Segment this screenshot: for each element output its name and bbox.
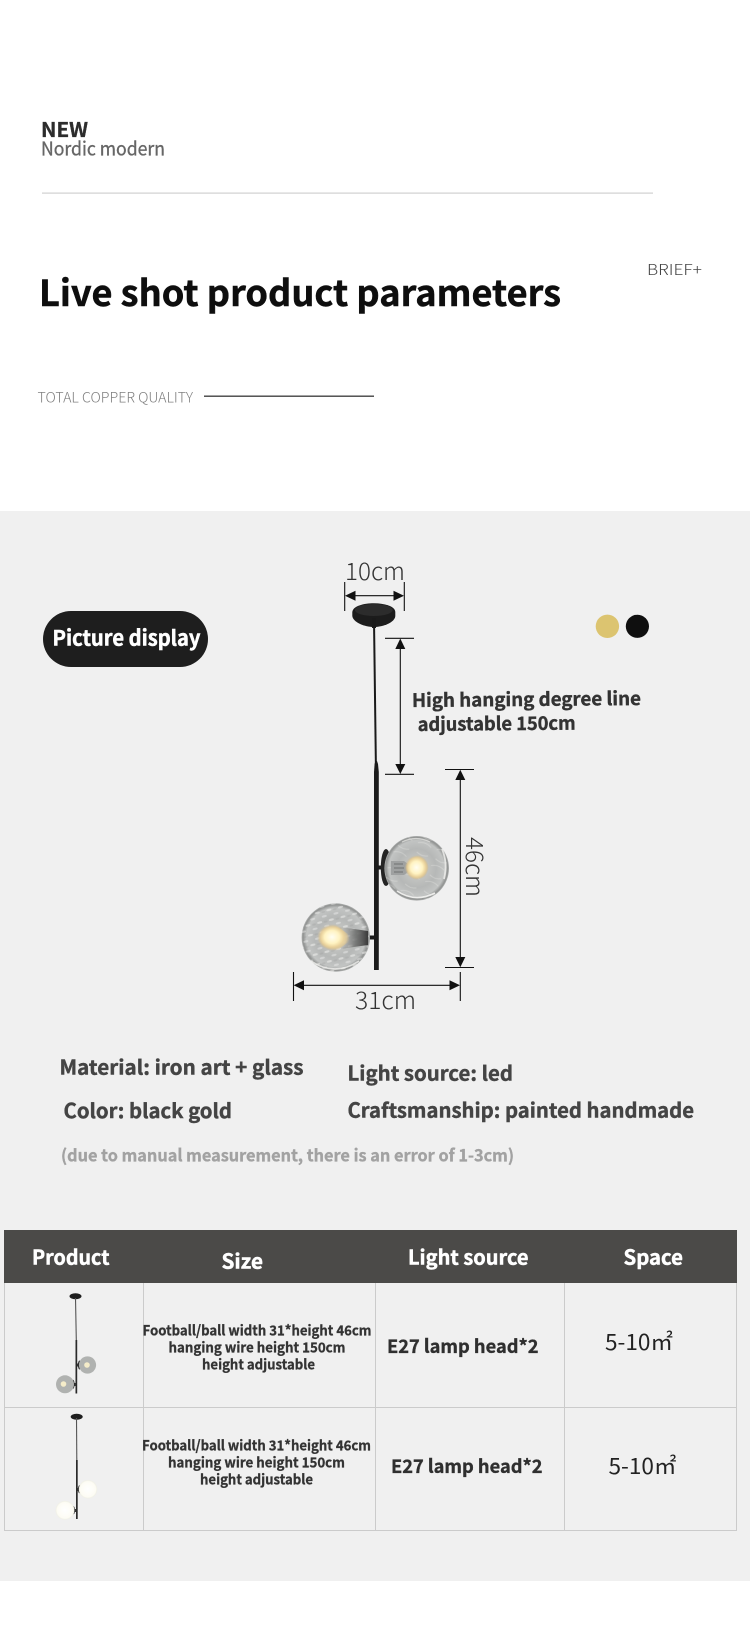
title: Live shot product parameters xyxy=(39,265,561,317)
size text: height adjustable xyxy=(202,1354,315,1374)
dimension: 10cm width xyxy=(345,552,405,611)
header: NEW / Nordic modern: Nordic modern xyxy=(41,134,165,162)
table header: Product xyxy=(32,1242,110,1270)
space text: 5-10㎡ xyxy=(608,1449,676,1481)
label: hanging wire adjustable: High hanging degree line xyxy=(412,685,641,713)
size text xyxy=(142,1320,372,1374)
size text: height adjustable xyxy=(200,1470,313,1490)
thumbnail: white glass lamp xyxy=(56,1414,97,1520)
size text xyxy=(142,1436,371,1490)
label: hanging wire adjustable xyxy=(412,685,641,737)
light source text: E27 lamp head*2 xyxy=(387,1333,538,1359)
lower globe xyxy=(302,903,370,972)
space text: 5-10㎡ xyxy=(605,1325,673,1357)
note: measurement error: (due to manual measurement, there is an error of 1-3cm) xyxy=(61,1142,514,1166)
dimension: hanging wire arrow xyxy=(385,638,414,774)
table header: Size xyxy=(222,1246,263,1274)
panel: grey product section xyxy=(0,511,750,1581)
dimension: 46cm height: 46cm xyxy=(459,837,494,897)
light source text: E27 lamp head*2 xyxy=(391,1453,542,1479)
colour swatches: gold and black xyxy=(596,615,649,638)
product image: pendant lamp xyxy=(302,603,449,972)
thumbnail: smoke glass lamp xyxy=(56,1293,96,1394)
text block: material specs: Craftsmanship: painted handmade xyxy=(348,1094,694,1124)
dimension: 10cm width: 10cm xyxy=(345,552,405,587)
upper globe xyxy=(384,836,449,901)
text block: material specs: Material: iron art + glass xyxy=(60,1052,304,1080)
label: BRIEF+: BRIEF+ xyxy=(647,259,702,280)
size text: hanging wire height 150cm xyxy=(168,1452,345,1472)
label: hanging wire adjustable: adjustable 150cm xyxy=(418,710,576,737)
dimension: 31cm width: 31cm xyxy=(355,981,416,1016)
table row 2 xyxy=(56,1414,677,1520)
table header: Space xyxy=(624,1242,683,1270)
table: product parameters xyxy=(4,1230,737,1530)
text block: material specs: Light source: led xyxy=(348,1058,513,1086)
subtitle: total copper quality: TOTAL COPPER QUALITY xyxy=(38,388,193,408)
table header xyxy=(4,1230,737,1283)
badge: Picture display xyxy=(43,611,208,667)
table row 1 xyxy=(56,1293,673,1394)
header: NEW / Nordic modern: NEW xyxy=(41,114,88,143)
size text: Football/ball width 31*height 46cm xyxy=(142,1320,372,1340)
badge: Picture display: Picture display xyxy=(52,622,200,652)
wire xyxy=(374,620,376,766)
dimension: 31cm width xyxy=(294,972,460,1016)
canopy xyxy=(352,603,395,627)
tube xyxy=(374,761,379,970)
table header: Light source xyxy=(408,1242,528,1270)
dimension: 46cm height xyxy=(445,770,494,968)
size text: hanging wire height 150cm xyxy=(168,1338,346,1358)
header: NEW / Nordic modern xyxy=(41,114,165,162)
size text: Football/ball width 31*height 46cm xyxy=(142,1436,371,1456)
upper arm and disc xyxy=(377,866,386,870)
lower arm and disc xyxy=(369,936,375,940)
text block: material specs xyxy=(60,1052,694,1124)
text block: material specs: Color: black gold xyxy=(64,1095,232,1124)
